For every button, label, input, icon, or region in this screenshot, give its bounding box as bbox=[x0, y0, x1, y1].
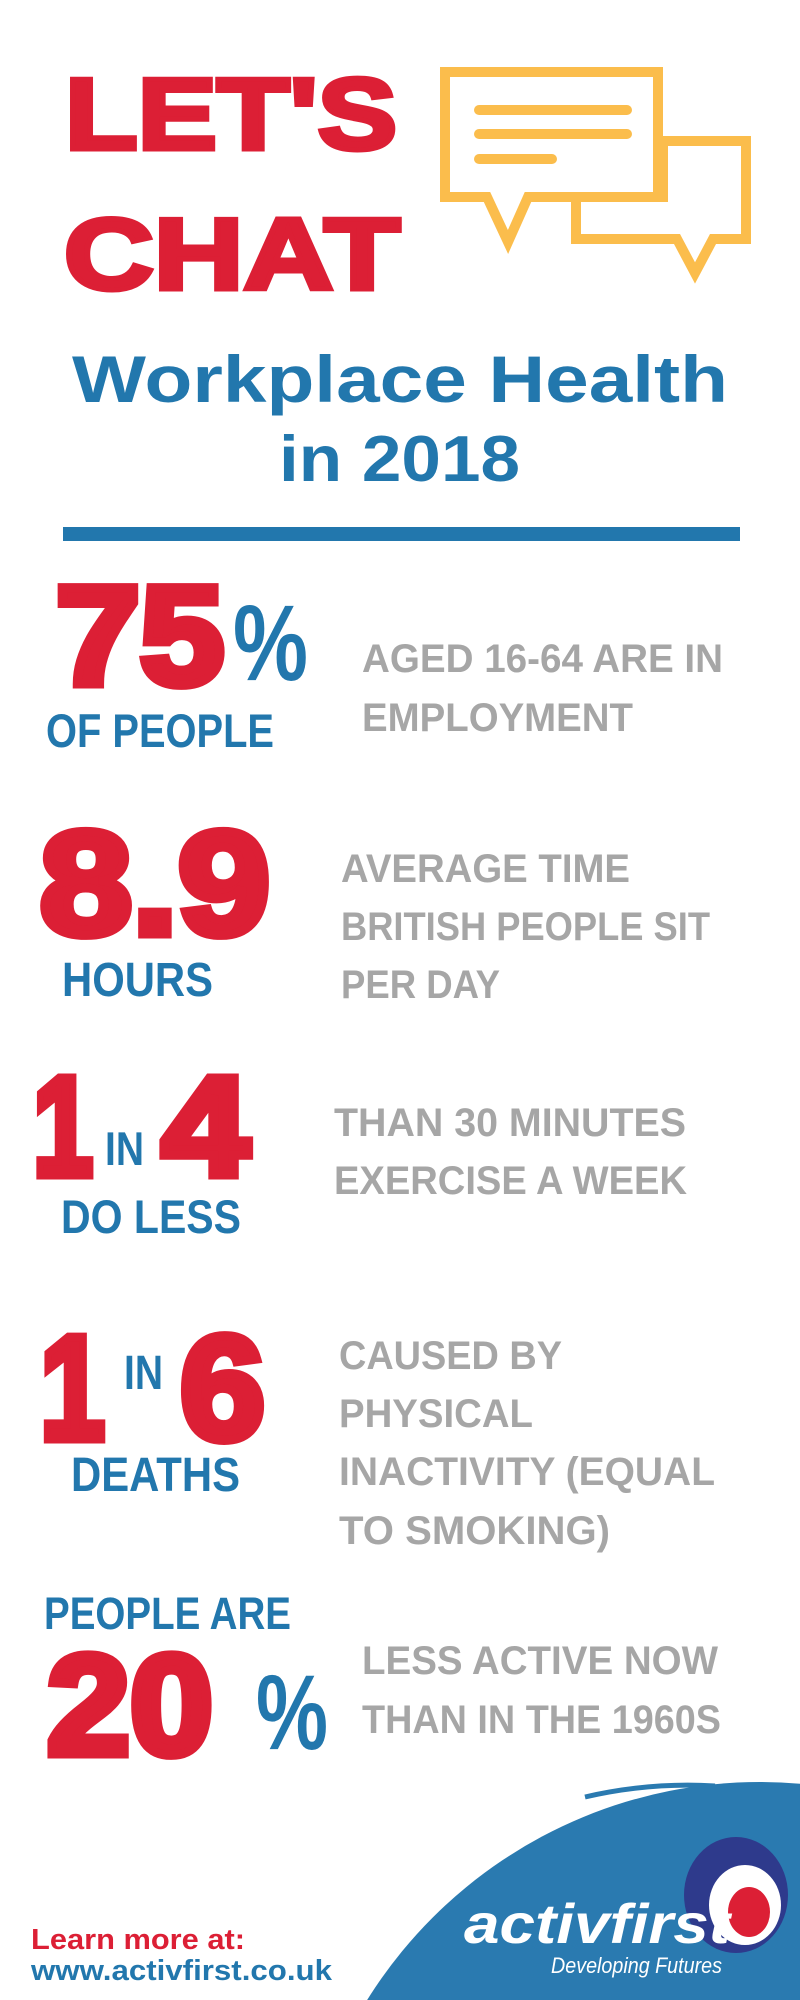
subtitle: Workplace Health in 2018 bbox=[72, 342, 728, 495]
text: employment bbox=[362, 637, 723, 740]
logo: activfirst blue circle bbox=[297, 1782, 800, 2000]
stat 3: 1 in 4 do less: IN bbox=[105, 1122, 144, 1175]
stat 4: 1 in 6 deaths: 6 bbox=[180, 1306, 265, 1471]
text: inactivity: CAUSED BY bbox=[339, 1334, 562, 1378]
text: inactivity: PHYSICAL bbox=[339, 1392, 533, 1436]
stat 4: 1 in 6 deaths bbox=[40, 1306, 715, 1553]
stat 1: 75% of people: 75 bbox=[56, 557, 224, 714]
text: exercise: THAN 30 MINUTES bbox=[334, 1101, 686, 1145]
stat 3: 1 in 4 do less bbox=[33, 1047, 687, 1243]
stat 3: 1 in 4 do less: 1 bbox=[33, 1047, 93, 1205]
text: exercise bbox=[334, 1101, 687, 1203]
footer: learn more: www.activfirst.co.uk bbox=[30, 1955, 333, 1987]
title: LET'S CHAT: CHAT bbox=[64, 199, 400, 311]
stat 5: people are 20%: 20 bbox=[47, 1626, 213, 1785]
text: less active: THAN IN THE 1960S bbox=[362, 1698, 721, 1742]
text: inactivity: TO SMOKING) bbox=[339, 1509, 610, 1553]
text: sitting bbox=[341, 847, 710, 1007]
footer: learn more: Learn more at: bbox=[31, 1924, 245, 1956]
stat 4: 1 in 6 deaths: DEATHS bbox=[71, 1449, 240, 1502]
text: employment: AGED 16-64 ARE IN bbox=[362, 637, 723, 681]
icon: speech bubbles bbox=[445, 72, 746, 273]
stat 3: 1 in 4 do less: DO LESS bbox=[61, 1190, 241, 1243]
icon: target rings bbox=[684, 1837, 788, 1953]
footer: learn more bbox=[30, 1924, 333, 1987]
text: sitting: BRITISH PEOPLE SIT bbox=[341, 905, 710, 949]
text: employment: EMPLOYMENT bbox=[362, 696, 633, 740]
text: less active bbox=[362, 1639, 721, 1742]
stat 5: people are 20% bbox=[44, 1588, 721, 1785]
stat 2: 8.9 hours bbox=[40, 802, 710, 1007]
stat 4: 1 in 6 deaths: IN bbox=[124, 1347, 163, 1400]
text: exercise: EXERCISE A WEEK bbox=[334, 1159, 687, 1203]
logo: activfirst blue circle: activfirst bbox=[464, 1892, 733, 1955]
stat 2: 8.9 hours: 8.9 bbox=[40, 802, 270, 966]
text: sitting: PER DAY bbox=[341, 963, 500, 1007]
logo: activfirst blue circle: Developing Futures bbox=[551, 1953, 722, 1978]
text: less active: LESS ACTIVE NOW bbox=[362, 1639, 718, 1683]
subtitle: Workplace Health in 2018: Workplace Health bbox=[72, 342, 728, 416]
stat 5: people are 20%: % bbox=[256, 1652, 328, 1772]
divider bar bbox=[63, 527, 740, 541]
stat 2: 8.9 hours: HOURS bbox=[62, 954, 213, 1007]
text: inactivity: INACTIVITY (EQUAL bbox=[339, 1450, 715, 1494]
stat 3: 1 in 4 do less: 4 bbox=[162, 1047, 249, 1205]
text: inactivity bbox=[339, 1334, 715, 1553]
title: LET'S CHAT: LET'S bbox=[65, 59, 397, 171]
stat 4: 1 in 6 deaths: 1 bbox=[40, 1306, 105, 1471]
title: LET'S CHAT bbox=[64, 59, 400, 311]
stat 1: 75% of people: OF PEOPLE bbox=[46, 704, 274, 757]
stat 5: people are 20%: PEOPLE ARE bbox=[44, 1588, 291, 1639]
stat 1: 75% of people bbox=[46, 557, 723, 757]
subtitle: Workplace Health in 2018: in 2018 bbox=[279, 422, 520, 495]
stat 1: 75% of people: % bbox=[233, 582, 308, 703]
text: sitting: AVERAGE TIME bbox=[341, 847, 630, 891]
